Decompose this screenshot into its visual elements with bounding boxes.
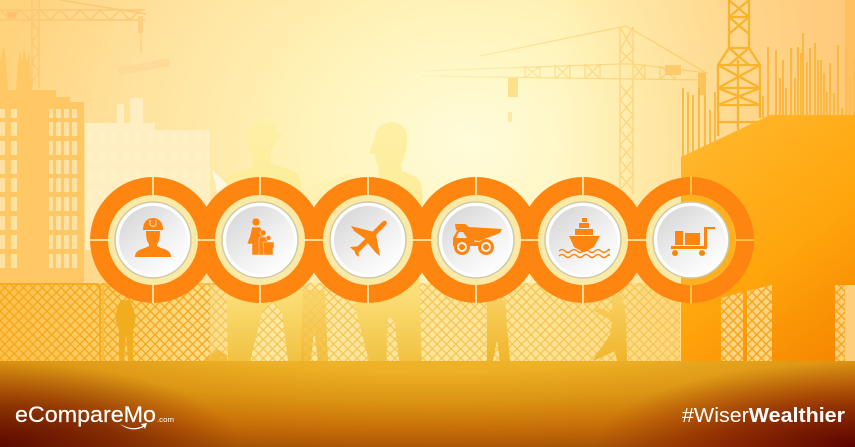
ring separators: [90, 177, 754, 303]
worker left: [217, 119, 304, 362]
icon: dump truck: [453, 224, 502, 255]
worker right: [355, 122, 422, 368]
pale triangle: [212, 170, 227, 196]
right crane tower: [718, 0, 760, 136]
left pale building: [85, 98, 210, 250]
blueprint: [300, 172, 354, 204]
icon disks: [108, 195, 736, 285]
icon: family: [247, 218, 274, 255]
icon: luggage cart: [671, 227, 715, 256]
right building: [681, 115, 855, 370]
ring chain: [90, 177, 754, 303]
icon: ship: [559, 218, 609, 258]
left fence: [0, 283, 680, 362]
left dark building: [0, 46, 84, 284]
logo: eCompareMo.com: eCompareMo: [15, 402, 156, 427]
logo smile arrow: [120, 423, 147, 429]
middle figure legs: [115, 290, 627, 361]
right fence: [721, 285, 855, 361]
logo: eCompareMo.com: .com: [157, 415, 174, 424]
worker silhouettes: [217, 119, 422, 368]
icon: worker: [135, 218, 171, 257]
ground band: [0, 361, 855, 447]
rebar rods: [683, 33, 854, 157]
left crane: [0, 0, 170, 88]
icon: airplane: [350, 221, 387, 257]
hashtag: #WiserWealthier: [682, 405, 845, 427]
right tall pillar: [845, 0, 855, 114]
center crane: [420, 26, 708, 195]
